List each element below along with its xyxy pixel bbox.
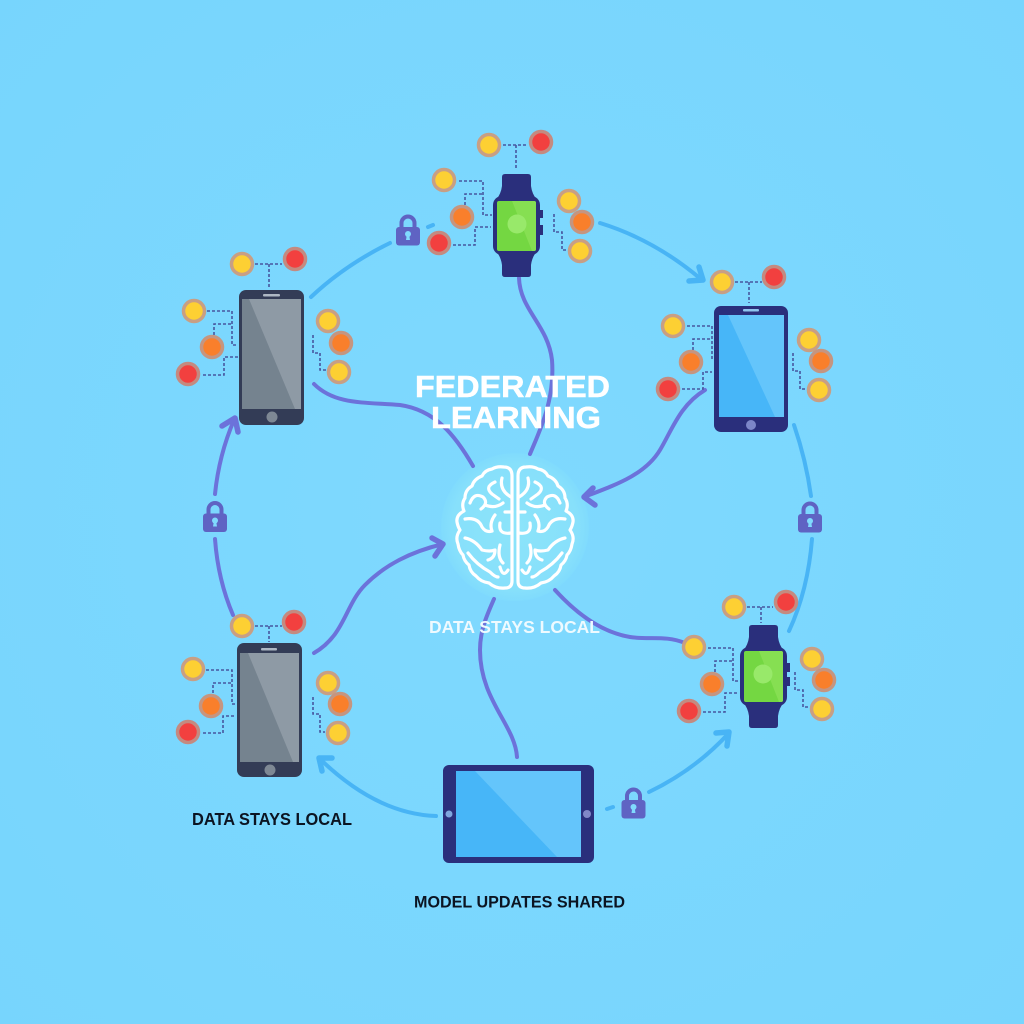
- icon: lock top: [396, 216, 420, 246]
- tablet body: [443, 765, 594, 863]
- speaker: [263, 294, 280, 296]
- arrow: bottom tablet to bottom-left phone: [319, 758, 436, 816]
- device node: top-left smartphone: [178, 248, 352, 425]
- link: bottom tablet to brain: [480, 599, 517, 757]
- title: LEARNING: [431, 401, 601, 435]
- watch strap: [496, 174, 537, 277]
- phone screen: [242, 299, 301, 409]
- phone body: [239, 290, 304, 425]
- speaker: [261, 648, 277, 650]
- device node: bottom tablet: [443, 765, 594, 863]
- watch screen: [497, 201, 536, 251]
- data links: [703, 607, 809, 712]
- arrow: bottom-left phone to brain: [314, 538, 443, 653]
- watch buttons: [540, 210, 543, 235]
- watch strap: [743, 625, 784, 728]
- data dots: [178, 248, 352, 384]
- caption: data stays local (center): DATA STAYS LOCAL: [429, 617, 600, 637]
- arrow: right tablet to brain: [584, 390, 705, 505]
- link: bottom-right watch to brain: [555, 590, 685, 643]
- icon: brain: [457, 467, 573, 588]
- link: top watch to brain: [519, 278, 552, 454]
- data dots: [428, 132, 592, 262]
- arrow: bottom-left phone to top-left phone with lock gap: [215, 418, 238, 615]
- screen highlight: [248, 653, 299, 762]
- glow behind brain: [441, 453, 589, 601]
- caption: model updates shared: MODEL UPDATES SHARED: [414, 892, 625, 912]
- caption: data stays local (bottom left): DATA STAYS LOCAL: [192, 809, 352, 829]
- home button: [266, 412, 278, 422]
- data links: [203, 264, 326, 375]
- tablet screen: [456, 771, 581, 857]
- watch screen: [744, 651, 783, 702]
- title: [415, 370, 610, 435]
- data links: [682, 282, 807, 389]
- icon: lock left: [203, 503, 227, 532]
- screen highlight: [512, 201, 536, 251]
- speaker: [743, 309, 759, 312]
- home button: [746, 420, 756, 430]
- title: FEDERATED: [415, 370, 610, 404]
- data dots: [658, 266, 832, 400]
- arrow: right tablet to bottom-right watch with lock gap: [789, 425, 812, 631]
- screen highlight: [249, 299, 301, 409]
- phone body: [237, 643, 302, 777]
- tablet screen: [719, 315, 784, 417]
- device node: top smartwatch: [428, 132, 592, 277]
- tablet body: [714, 306, 788, 432]
- device node: right tablet: [658, 266, 832, 432]
- device node: bottom-left smartphone: [178, 612, 350, 777]
- device node: bottom-right smartwatch: [678, 592, 834, 728]
- phone screen: [240, 653, 299, 762]
- watch case: [493, 196, 540, 255]
- data dots: [678, 592, 834, 722]
- icon: lock right: [798, 504, 822, 532]
- watch case: [740, 647, 787, 706]
- screen highlight: [759, 651, 783, 702]
- screen dot: [508, 214, 526, 234]
- watch buttons: [787, 663, 790, 686]
- link: top-left phone to brain: [314, 384, 473, 466]
- home button: [264, 764, 276, 776]
- data dots: [178, 612, 350, 744]
- screen dot: [754, 664, 772, 684]
- arrow: left phone to top watch with lock gap: [311, 225, 433, 297]
- data links: [453, 145, 567, 250]
- data links: [203, 626, 325, 733]
- arrow: bottom tablet to bottom-right watch: [607, 732, 729, 809]
- screen highlight: [475, 771, 581, 857]
- side button left: [446, 810, 452, 818]
- side button right: [583, 810, 591, 818]
- icon: lock bottom: [622, 790, 646, 818]
- screen highlight: [728, 315, 784, 417]
- arrow: top watch to right tablet: [600, 223, 703, 281]
